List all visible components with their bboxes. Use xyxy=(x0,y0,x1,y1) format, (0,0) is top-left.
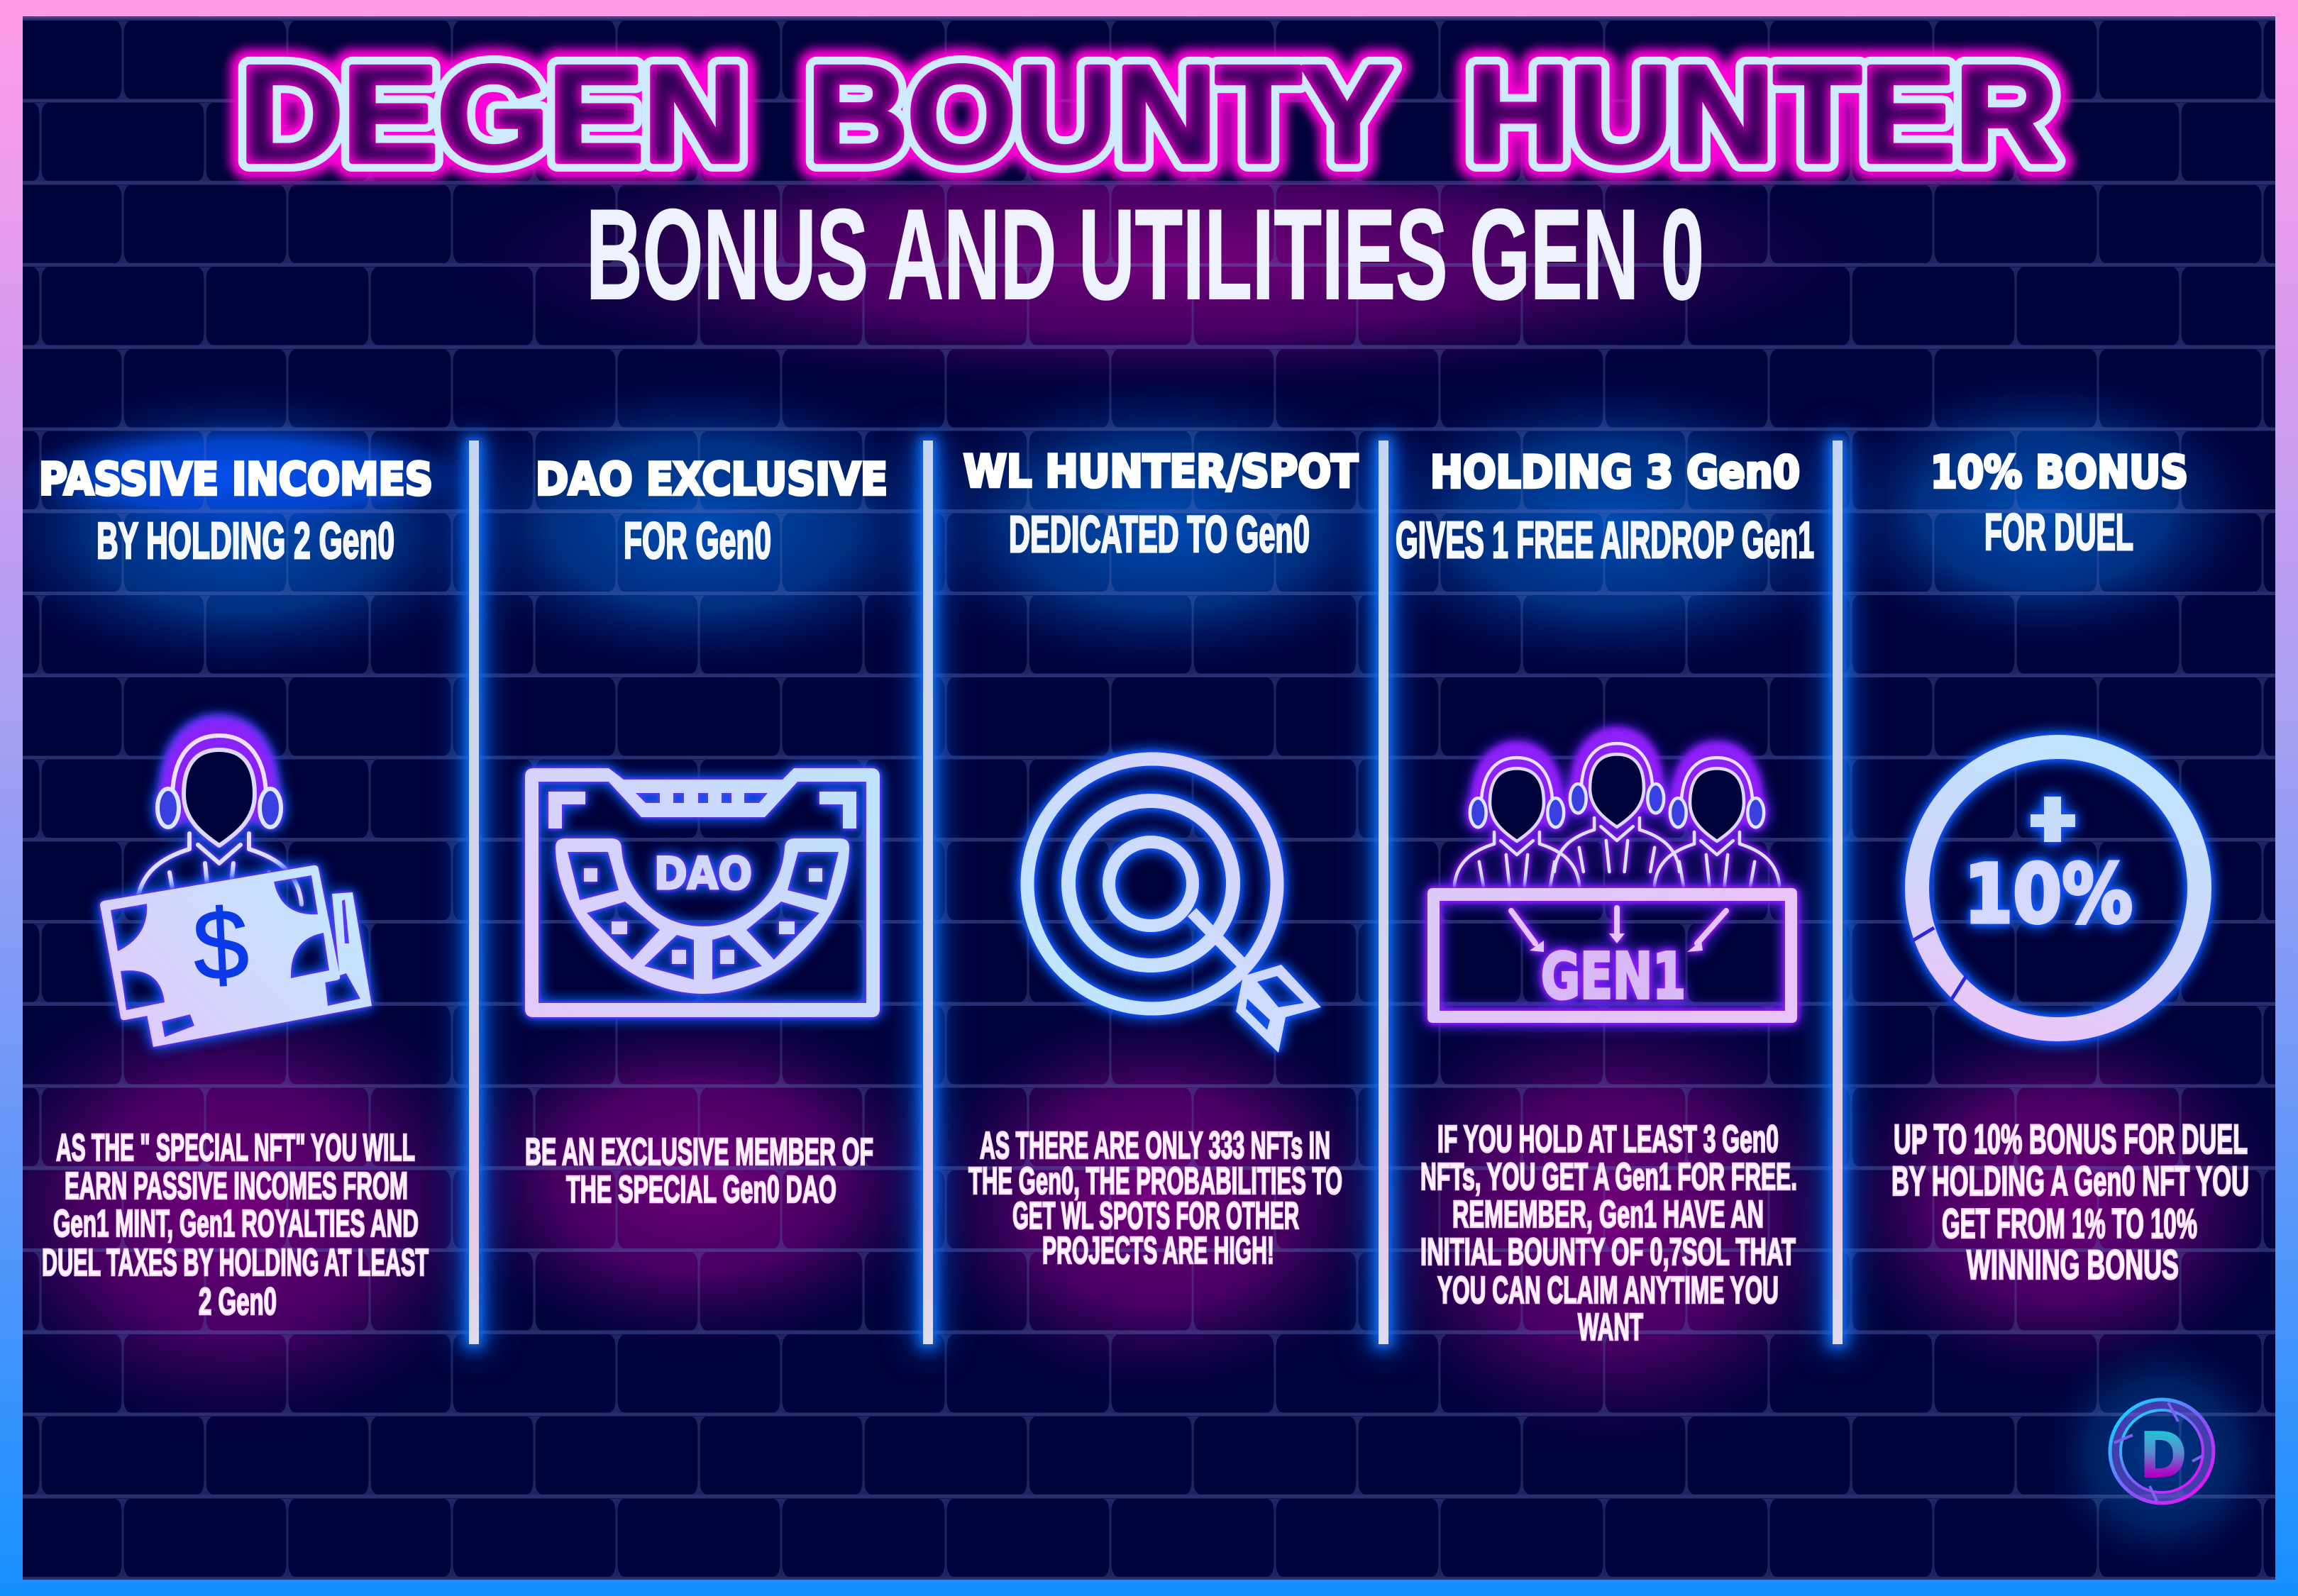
body text: holding 3 Gen0: NFTs, YOU GET A Gen1 FOR FREE. xyxy=(1420,1156,1797,1198)
body text: passive incomes: Gen1 MINT, Gen1 ROYALTIES AND xyxy=(53,1202,419,1245)
body text: DAO exclusive xyxy=(525,1131,873,1211)
subheading: dedicated to Gen0: DEDICATED TO Gen0 xyxy=(1009,506,1310,563)
body text: holding 3 Gen0 xyxy=(1420,1118,1797,1348)
logo badge: D xyxy=(2139,1419,2187,1493)
icon: DAO table: DAO xyxy=(654,848,752,899)
subheading: for Gen0: FOR Gen0 xyxy=(624,513,771,570)
heading: 10% bonus: 10% BONUS xyxy=(1930,446,2188,498)
body text: holding 3 Gen0: YOU CAN CLAIM ANYTIME YOU xyxy=(1437,1269,1779,1312)
logo badge xyxy=(2110,1400,2214,1503)
icon: person holding money xyxy=(100,734,372,1047)
panel: WL hunter/spot xyxy=(963,445,1358,1272)
panel: 10% bonus xyxy=(1891,446,2249,1288)
title: DEGEN BOUNTY HUNTER: HUNTER xyxy=(1467,38,2057,190)
icon: 10 percent ring xyxy=(1913,747,2199,1029)
heading: WL hunter/spot: WL HUNTER/SPOT xyxy=(963,445,1358,497)
panel: holding 3 Gen0 xyxy=(1396,446,1814,1348)
body text: WL hunter/spot: GET WL SPOTS FOR OTHER xyxy=(1012,1195,1299,1237)
title: DEGEN BOUNTY HUNTER: BOUNTY xyxy=(807,38,1393,190)
body text: 10% bonus xyxy=(1891,1116,2249,1288)
subheading: by holding 2 Gen0: BY HOLDING 2 Gen0 xyxy=(96,513,394,570)
body text: holding 3 Gen0: WANT xyxy=(1578,1306,1643,1348)
title: DEGEN BOUNTY HUNTER: BOUNTY xyxy=(807,38,1393,190)
body text: holding 3 Gen0: INITIAL BOUNTY OF 0,7SOL THAT xyxy=(1420,1231,1796,1273)
body text: passive incomes: AS THE " SPECIAL NFT" YOU WILL xyxy=(56,1126,415,1169)
body text: passive incomes: EARN PASSIVE INCOMES FROM xyxy=(65,1165,408,1207)
body text: passive incomes: DUEL TAXES BY HOLDING AT LEAST xyxy=(42,1241,429,1284)
body text: DAO exclusive: BE AN EXCLUSIVE MEMBER OF xyxy=(525,1131,873,1173)
title: DEGEN BOUNTY HUNTER: BOUNTY xyxy=(807,38,1393,190)
body text: passive incomes xyxy=(42,1126,429,1323)
body text: WL hunter/spot: AS THERE ARE ONLY 333 NFTs IN xyxy=(980,1124,1330,1167)
icon: 10 percent ring: 10% xyxy=(1964,847,2133,941)
body text: passive incomes: 2 Gen0 xyxy=(199,1280,277,1323)
title: DEGEN BOUNTY HUNTER: DEGEN xyxy=(240,38,746,190)
subheading: gives 1 free airdrop Gen1: GIVES 1 FREE AIRDROP Gen1 xyxy=(1396,512,1814,569)
body text: WL hunter/spot: PROJECTS ARE HIGH! xyxy=(1042,1229,1274,1272)
body text: WL hunter/spot xyxy=(968,1124,1342,1272)
icon: three holders and Gen1 box: GEN1 xyxy=(1541,939,1686,1013)
title: DEGEN BOUNTY HUNTER: HUNTER xyxy=(1467,38,2057,190)
icon: DAO table xyxy=(525,768,880,1017)
icon: three holders and Gen1 box xyxy=(1427,743,1797,1023)
panel: DAO exclusive xyxy=(525,453,888,1211)
title: DEGEN BOUNTY HUNTER xyxy=(221,39,2082,189)
title: DEGEN BOUNTY HUNTER: HUNTER xyxy=(1467,38,2057,190)
panel: passive incomes xyxy=(39,453,433,1323)
title: DEGEN BOUNTY HUNTER: DEGEN xyxy=(240,38,746,190)
icon: target with arrow xyxy=(1027,759,1321,1053)
heading: passive incomes: PASSIVE INCOMES xyxy=(39,453,433,505)
column dividers xyxy=(458,433,1854,1352)
title: DEGEN BOUNTY HUNTER: DEGEN xyxy=(240,38,746,190)
heading: DAO exclusive: DAO EXCLUSIVE xyxy=(536,453,888,505)
heading: holding 3 Gen0: HOLDING 3 Gen0 xyxy=(1430,446,1800,498)
icon: person holding money: $ xyxy=(190,887,251,1002)
subheading: for duel: FOR DUEL xyxy=(1984,504,2133,561)
body text: holding 3 Gen0: IF YOU HOLD AT LEAST 3 Gen0 xyxy=(1437,1118,1779,1160)
body text: holding 3 Gen0: REMEMBER, Gen1 HAVE AN xyxy=(1452,1193,1764,1236)
body text: WL hunter/spot: THE Gen0, THE PROBABILITIES TO xyxy=(968,1160,1342,1202)
body text: DAO exclusive: THE SPECIAL Gen0 DAO xyxy=(566,1168,836,1211)
